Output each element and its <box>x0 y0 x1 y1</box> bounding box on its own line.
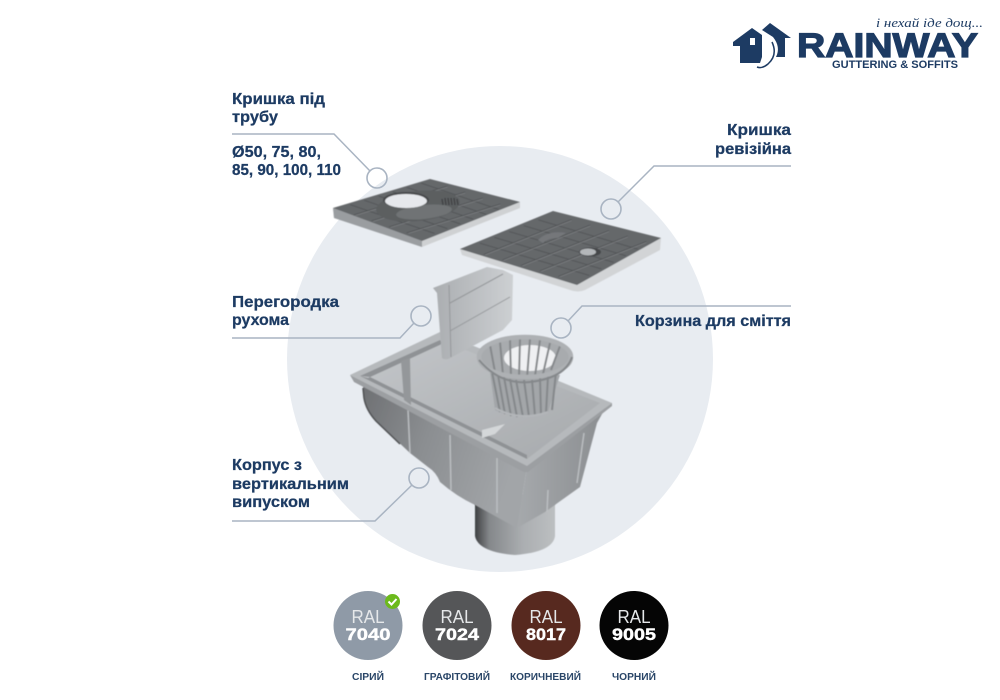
colour swatch: RAL 8017 <box>510 591 581 683</box>
callout: debris basket <box>551 306 791 338</box>
icon: selected check <box>385 594 400 609</box>
outlet pipe <box>475 495 555 555</box>
icon: houses <box>733 23 791 68</box>
label: inspection cover: ревізійна <box>715 141 791 158</box>
label: inspection cover: Кришка <box>727 122 791 139</box>
label: pipe cover: Кришка під <box>232 91 325 108</box>
colour swatch: RAL 8017: 8017 <box>526 625 566 644</box>
drain body <box>350 332 612 528</box>
colour swatch: RAL 7040 <box>334 591 402 683</box>
colour swatch: RAL 9005: RAL <box>618 607 650 627</box>
colour swatch: RAL 8017: КОРИЧНЕВИЙ <box>510 670 581 683</box>
label: inspection cover <box>715 122 791 158</box>
colour swatch: RAL 7024: RAL <box>440 607 474 627</box>
colour swatch: RAL 7024: ГРАФІТОВИЙ <box>424 670 490 683</box>
logo: Rainway: RAINWAY <box>797 27 978 65</box>
colour swatch: RAL 8017: RAL <box>530 607 562 627</box>
label: body with vertical outlet: Корпус з <box>232 457 302 474</box>
label: debris basket: Корзина для сміття <box>635 313 791 330</box>
logo: Rainway <box>733 15 983 71</box>
lid: pipe cover <box>333 179 520 247</box>
background circle <box>287 146 713 572</box>
callout: movable partition <box>232 294 431 338</box>
colour swatch: RAL 7040: СІРИЙ <box>352 670 384 683</box>
movable partition <box>433 267 513 359</box>
label: pipe cover: 85, 90, 100, 110 <box>232 162 341 179</box>
colour swatch: RAL 9005: ЧОРНИЙ <box>612 670 656 683</box>
label: pipe cover: Ø50, 75, 80, <box>232 144 321 161</box>
lid: inspection cover <box>460 211 665 292</box>
colour swatch: RAL 7024 <box>422 591 492 683</box>
label: body with vertical outlet: випуском <box>232 494 310 511</box>
colour swatch: RAL 7024: 7024 <box>435 625 480 644</box>
label: body with vertical outlet: вертикальним <box>232 476 349 493</box>
colour swatch: RAL 7040: 7040 <box>346 625 390 644</box>
label: movable partition: Перегородка <box>232 294 339 311</box>
label: body with vertical outlet <box>232 457 349 511</box>
callout: pipe cover <box>232 91 387 188</box>
colour swatch: RAL 9005 <box>600 591 668 683</box>
label: pipe cover <box>232 91 341 179</box>
label: movable partition <box>232 294 339 329</box>
logo: Rainway: і нехай іде дощ... <box>876 15 983 30</box>
colour swatch: RAL 7040: RAL <box>352 607 384 627</box>
label: pipe cover: трубу <box>232 109 278 126</box>
debris basket <box>477 336 573 417</box>
callout: body with vertical outlet <box>232 457 429 521</box>
label: movable partition: рухома <box>232 312 289 329</box>
logo: Rainway: GUTTERING & SOFFITS <box>832 59 958 71</box>
callout: inspection cover <box>601 122 791 219</box>
colour swatch: RAL 9005: 9005 <box>612 625 656 644</box>
